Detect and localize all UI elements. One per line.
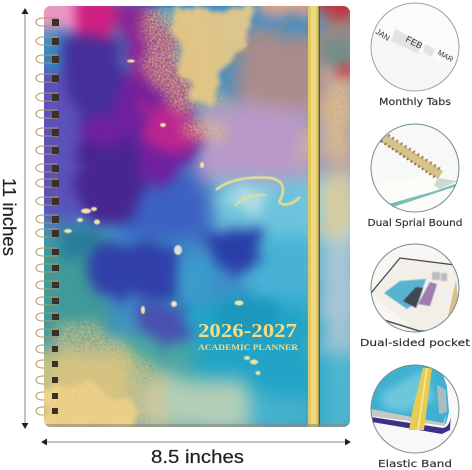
gold veins — [216, 16, 300, 206]
height arrow — [22, 8, 28, 429]
feature: monthly tabs: MAR — [436, 48, 455, 64]
feature: monthly tabs: FEB — [404, 34, 424, 51]
label: dual-sided pocket: Dual-sided pocket — [360, 338, 470, 349]
label: elastic band: Elastic Band — [378, 459, 452, 470]
width arrow — [41, 438, 351, 446]
gold dust — [45, 8, 350, 430]
label: monthly tabs: Monthly Tabs — [379, 97, 451, 108]
feature: elastic band — [370, 365, 459, 453]
elastic band — [308, 6, 320, 427]
title: 2026-2027: 2026-2027 — [198, 321, 297, 342]
subtitle: academic planner: ACADEMIC PLANNER — [198, 342, 299, 352]
feature: dual spiral bound — [370, 124, 460, 220]
label: dual spiral bound: Dual Sprial Bound — [368, 218, 462, 229]
feature: dual-sided pocket — [371, 244, 460, 332]
width label: 8.5 inches — [151, 447, 244, 467]
planner cover — [44, 6, 350, 427]
feature: monthly tabs — [370, 3, 460, 95]
spiral binding — [36, 18, 59, 415]
feature: monthly tabs: JAN — [374, 27, 392, 43]
